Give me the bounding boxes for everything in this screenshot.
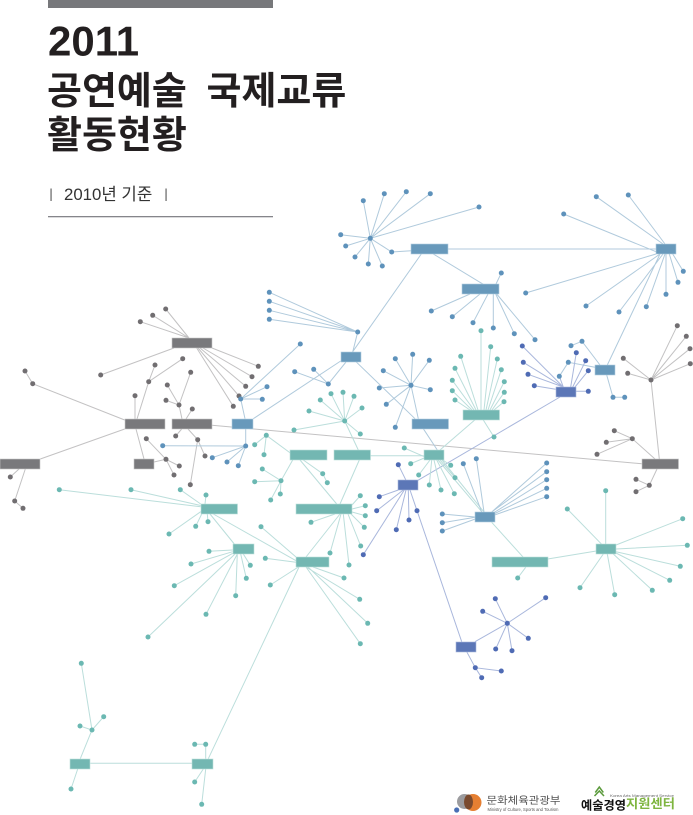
network cluster: teal upward fan: [450, 328, 507, 440]
box: teal centre lower: [296, 557, 329, 567]
box: teal west: [201, 504, 238, 514]
network cluster: grey east: [594, 323, 693, 494]
box: teal centre: [424, 450, 444, 460]
dots: blue hub star: [377, 352, 433, 430]
box: teal wide: [492, 557, 548, 567]
network cluster: grey centre: [164, 370, 642, 487]
network cluster: blue north east: [523, 192, 686, 365]
box: blue hub star: [412, 419, 448, 429]
box: blue north east: [656, 244, 676, 254]
box: teal lower left star: [233, 544, 254, 554]
dots: teal centre: [402, 446, 458, 496]
box: dark blue east: [556, 387, 576, 397]
network cluster: teal wide box: [492, 522, 596, 580]
box: grey small: [134, 459, 154, 469]
network cluster: grey hub north: [98, 306, 261, 409]
dots: blue north east: [523, 192, 686, 314]
network cluster: teal lower left star: [146, 544, 254, 640]
network cluster: teal east star: [565, 488, 690, 597]
box: dark blue south: [456, 642, 476, 652]
dots: blue centre: [267, 290, 360, 386]
box: grey far west: [0, 459, 40, 469]
network cluster: teal south west: [68, 661, 213, 807]
title: 공연예술 국제교류: [47, 60, 346, 115]
dots: teal centre wide: [308, 493, 368, 568]
box: blue west: [232, 419, 253, 429]
dots: teal centre lower: [258, 524, 370, 646]
box: blue upper middle: [462, 284, 499, 294]
network cluster: blue hub star: [377, 352, 448, 450]
dots: teal upward fan: [450, 328, 507, 440]
network cluster: blue upper middle: [429, 270, 538, 342]
box: teal upward fan: [463, 410, 500, 420]
dots: grey east: [594, 323, 693, 494]
dots: teal lower left star: [146, 549, 253, 640]
title: 2011: [48, 18, 139, 64]
dot: teal wide: [515, 576, 520, 580]
title: [47, 18, 346, 159]
dots: teal left upper: [252, 433, 330, 502]
box: dark blue centre: [398, 480, 418, 490]
box: teal south west left: [70, 759, 90, 769]
dots: blue east fan: [440, 456, 549, 534]
dot: blue link: [557, 374, 562, 379]
subtitle: reference year: 2010년 기준: [64, 185, 152, 204]
subtitle rule: [48, 216, 273, 217]
network cluster: blue west: [160, 342, 303, 468]
logo: ministry of culture, sports and tourism: 문화체육관광부: [486, 792, 561, 807]
logo: korea arts management service: 예술경영: [581, 796, 626, 814]
box: grey centre: [172, 419, 212, 429]
logo: korea arts management service: Korea Arts Management Service: [610, 793, 674, 798]
dots: grey west: [8, 356, 185, 511]
logo: korea arts management service: [581, 787, 675, 814]
logo: ministry of culture, sports and tourism: Ministry of Culture, Sports and Tourism: [488, 807, 559, 812]
network cluster: grey west: [0, 356, 185, 511]
dots: blue east small: [566, 339, 627, 400]
dots: dark blue south: [473, 595, 548, 680]
dots: teal west: [57, 487, 210, 536]
box: teal middle upper: [334, 450, 370, 460]
top bar: [48, 0, 273, 8]
box: blue east fan: [475, 512, 495, 522]
network cluster: teal centre lower: [208, 514, 370, 759]
box: grey west: [125, 419, 165, 429]
network cluster: teal middle upper: [292, 390, 424, 504]
network cluster: blue east fan: [440, 456, 549, 534]
box: teal centre wide: [296, 504, 352, 514]
network cluster: teal centre fan: [402, 420, 484, 512]
dots: blue west: [160, 342, 303, 468]
dots: teal east star: [565, 488, 690, 597]
network cluster: blue centre: [253, 290, 415, 419]
dots: grey centre: [164, 370, 208, 487]
dots: teal south west: [68, 661, 208, 807]
box: grey north: [172, 338, 212, 348]
network cluster: teal left upper: [252, 433, 337, 504]
network cluster: dark blue south: [456, 595, 548, 680]
logo: korea arts management service: 지원센터: [626, 793, 675, 812]
network cluster: dark blue east: [418, 344, 591, 480]
logo: ministry of culture, sports and tourism: [454, 792, 561, 813]
box: teal south west right: [192, 759, 213, 769]
box: blue centre: [341, 352, 361, 362]
dots: grey north: [98, 306, 261, 409]
box: blue north: [411, 244, 448, 254]
box: teal east star: [596, 544, 616, 554]
network cluster: blue east small: [559, 339, 627, 400]
title: 활동현황: [47, 104, 187, 159]
dots: teal middle upper: [292, 390, 364, 436]
network cluster: dark blue centre: [361, 462, 462, 642]
dots: blue north: [338, 189, 482, 268]
dots: dark blue east: [520, 344, 591, 394]
box: teal left upper: [290, 450, 327, 460]
box: blue east small: [595, 365, 615, 375]
network cluster: teal centre wide: [296, 493, 368, 568]
box: grey east: [642, 459, 678, 469]
dots: dark blue centre: [361, 462, 420, 557]
network cluster: blue north: [338, 189, 656, 352]
network cluster: teal west: [57, 487, 296, 561]
dots: blue upper middle: [429, 270, 538, 342]
